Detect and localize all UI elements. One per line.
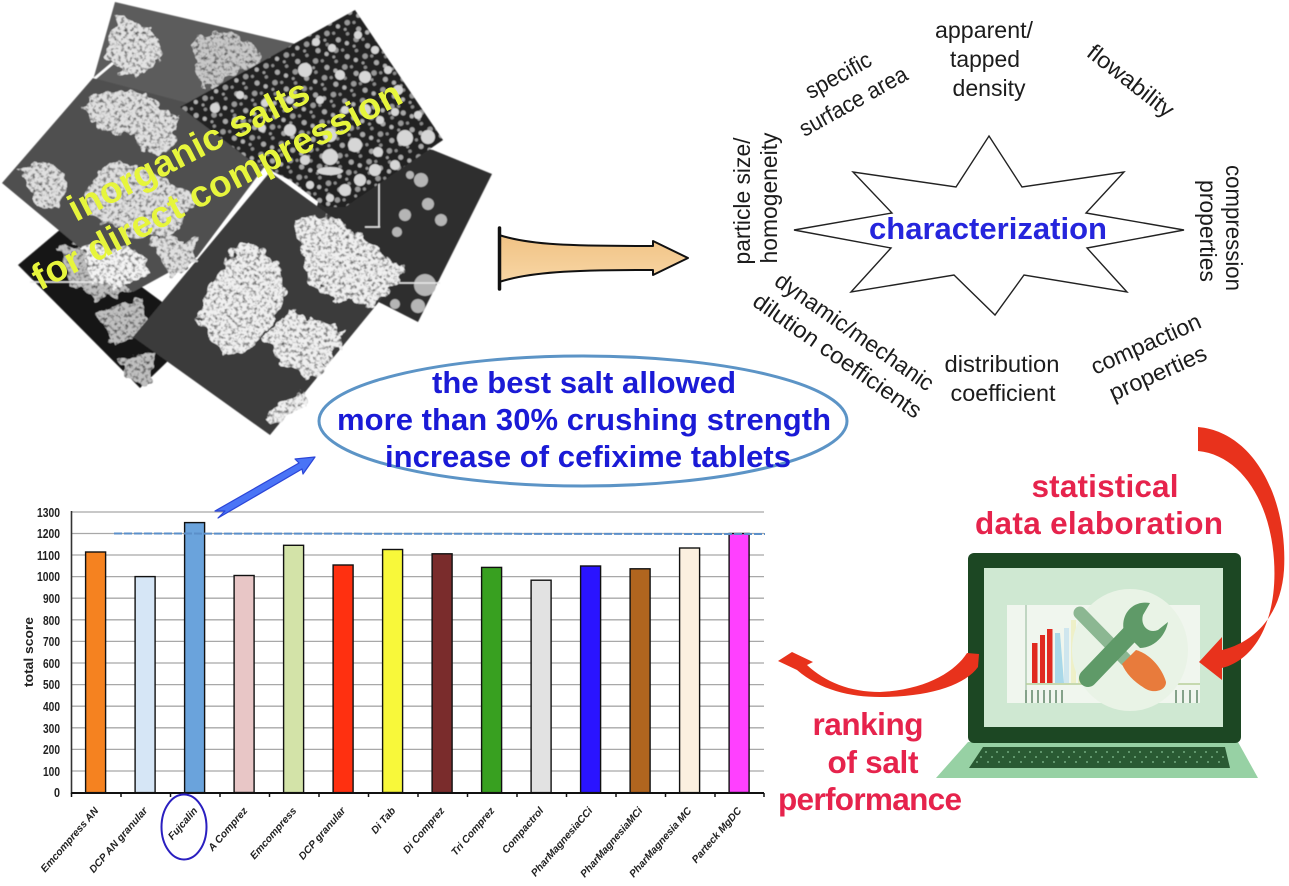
label: compression properties: compression	[1221, 165, 1247, 291]
y axis: 800	[43, 614, 60, 628]
micrograph: main flower-like particles	[133, 172, 405, 435]
y axis: 200	[43, 743, 60, 757]
x axis labels: Di Comprez	[401, 805, 448, 856]
y axis title: total score	[21, 617, 36, 687]
laptop base	[936, 742, 1258, 778]
y axis: 1200	[37, 527, 60, 541]
x axis labels: DCP granular	[297, 805, 349, 862]
label: compression properties	[1195, 165, 1247, 291]
arrow: red, curved from laptop to chart	[778, 652, 979, 697]
threshold dashed line	[114, 532, 765, 535]
micrograph: top particles	[93, 2, 300, 150]
y axis: 100	[43, 765, 60, 779]
label: particle size/homogeneity: homogeneity	[756, 132, 782, 264]
y axis: 500	[43, 678, 60, 692]
callout: best salt ellipse	[319, 356, 847, 486]
label: ranking of salt performance: performance	[778, 781, 962, 817]
bars	[86, 523, 749, 793]
label: compaction properties: compaction	[1087, 308, 1205, 380]
x axis labels	[39, 805, 745, 880]
arrow: tan, collage to characterization	[499, 228, 688, 289]
y axis	[37, 506, 72, 800]
label: compaction properties: properties	[1105, 340, 1211, 406]
label: ranking of salt performance: ranking	[812, 706, 924, 742]
micrograph: small bright dots	[180, 10, 443, 207]
bar chart: total score	[21, 506, 765, 880]
label: particle size/homogeneity	[729, 132, 782, 264]
y axis: 1300	[37, 506, 60, 520]
label: ranking of salt performance: of salt	[828, 744, 919, 780]
label: statistical data elaboration	[975, 468, 1223, 541]
label: distribution coefficient	[944, 351, 1060, 406]
x axis	[71, 793, 764, 797]
photo collage: SEM micrographs	[2, 2, 492, 435]
label: apparent/tapped density	[935, 17, 1034, 101]
label: dynamic/mechanic dilution coefficients: dilution coefficients	[748, 287, 927, 423]
characterization star diagram	[729, 17, 1247, 423]
icon: screwdriver	[1080, 613, 1166, 691]
y axis: 300	[43, 722, 60, 736]
x axis labels: Compactrol	[500, 805, 547, 856]
y axis: 900	[43, 592, 60, 606]
tools circle	[1072, 589, 1188, 711]
y axis: 400	[43, 700, 60, 714]
x axis labels: PharMagnesia MC	[628, 805, 695, 880]
x axis labels: Emcompress AN	[39, 805, 102, 875]
x axis labels: Parteck MgDC	[690, 805, 745, 866]
arrow: blue, bar to callout	[215, 457, 315, 518]
x axis labels: Fujcalin	[166, 806, 200, 842]
label: specific surface area: surface area	[794, 60, 912, 141]
keyboard	[969, 747, 1230, 768]
micrograph: bottom left black	[18, 228, 200, 388]
screen chart panel	[1007, 605, 1200, 703]
grid lines	[71, 512, 764, 771]
label: apparent/tapped density: density	[952, 75, 1026, 101]
x axis labels: Di Tab	[370, 806, 398, 836]
x axis labels: PharMagnesiaMCi	[579, 805, 646, 880]
laptop illustration	[936, 553, 1258, 778]
star shape	[794, 136, 1184, 315]
callout: best salt ellipse: more than 30% crushing strength	[337, 402, 831, 437]
label: distribution coefficient: distribution	[944, 351, 1060, 377]
label: dynamic/mechanic dilution coefficients: dynamic/mechanic	[770, 267, 939, 396]
label: distribution coefficient: coefficient	[950, 380, 1056, 406]
star heading: characterization	[869, 211, 1107, 246]
icon: wrench	[1088, 603, 1168, 678]
callout: best salt ellipse: increase of cefixime tablets	[385, 439, 791, 474]
x axis labels: Emcompress	[249, 806, 299, 862]
y axis: 700	[43, 635, 60, 649]
label: statistical data elaboration: data elaboration	[975, 505, 1223, 541]
y axis: 1100	[37, 549, 60, 563]
label: particle size/homogeneity: particle size/	[729, 137, 755, 264]
micrograph: left angular particles	[2, 78, 290, 292]
label: flowability: flowability	[1082, 39, 1180, 123]
label: apparent/tapped density: tapped	[950, 46, 1020, 72]
collage title: for direct compression	[25, 73, 409, 298]
x axis labels: DCP AN granular	[88, 805, 151, 875]
label: specific surface area: specific	[800, 46, 876, 104]
laptop bezel	[968, 553, 1241, 743]
y axis: 0	[54, 786, 60, 800]
label: ranking of salt performance	[778, 706, 962, 817]
label: statistical data elaboration: statistical	[1032, 468, 1178, 504]
callout: best salt ellipse: the best salt allowed	[432, 365, 736, 400]
label: apparent/tapped density: apparent/	[935, 17, 1034, 43]
arrow: red, curved into laptop	[1198, 427, 1284, 680]
label: compaction properties	[1087, 308, 1211, 406]
collage title: inorganic salts	[61, 71, 316, 229]
y axis: 600	[43, 657, 60, 671]
micrograph: right round particles	[300, 130, 492, 322]
x axis labels: A Comprez	[206, 805, 251, 854]
x axis labels: Tri Comprez	[450, 805, 498, 858]
screen	[984, 568, 1223, 727]
y axis: 1000	[37, 570, 60, 584]
x axis labels: PharMagnesiaCCi	[530, 805, 596, 879]
label: compression properties: properties	[1195, 180, 1221, 282]
highlight circle: Fujcalin	[162, 794, 206, 860]
